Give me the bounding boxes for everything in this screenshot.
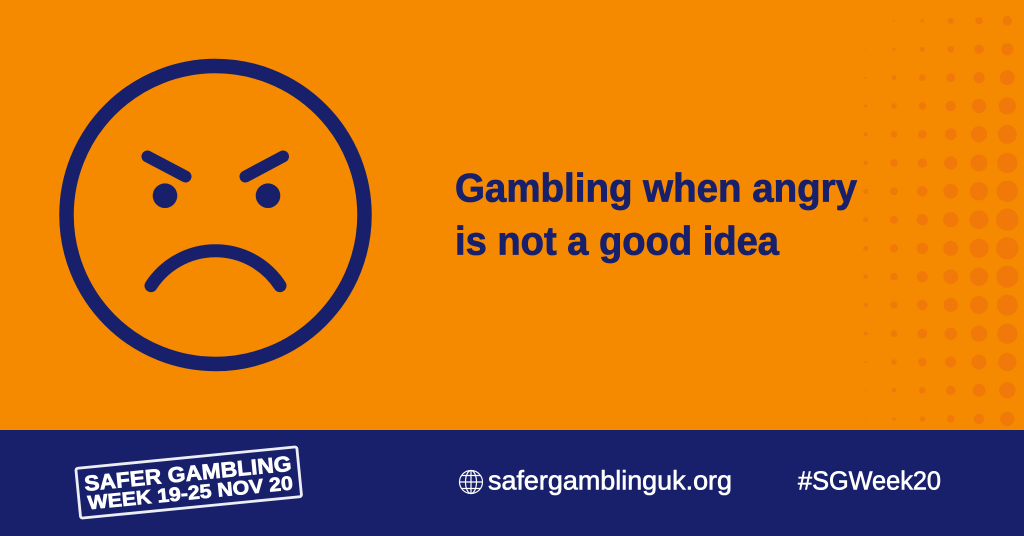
hashtag: #SGWeek20 (798, 467, 941, 495)
heading line 2: is not a good idea (455, 219, 780, 263)
website address: safergamblinguk.org (488, 465, 732, 495)
frowning mouth (151, 251, 280, 286)
navy footer band (0, 430, 1024, 536)
face outline (66, 66, 364, 364)
right eye (256, 183, 280, 208)
left eyebrow (148, 156, 186, 176)
left eye (153, 183, 177, 208)
right eyebrow (246, 156, 283, 176)
stamp border (76, 447, 302, 518)
stamp line 1: SAFER GAMBLING (83, 452, 293, 496)
halftone dot pattern (863, 16, 1018, 426)
heading (455, 167, 858, 263)
stamp logo: Safer Gambling Week (76, 447, 302, 518)
icon: globe (460, 470, 482, 494)
icon: angry face (66, 66, 364, 364)
heading line 1: Gambling when angry (455, 167, 858, 211)
stamp line 2: WEEK 19-25 NOV 20 (87, 472, 294, 514)
